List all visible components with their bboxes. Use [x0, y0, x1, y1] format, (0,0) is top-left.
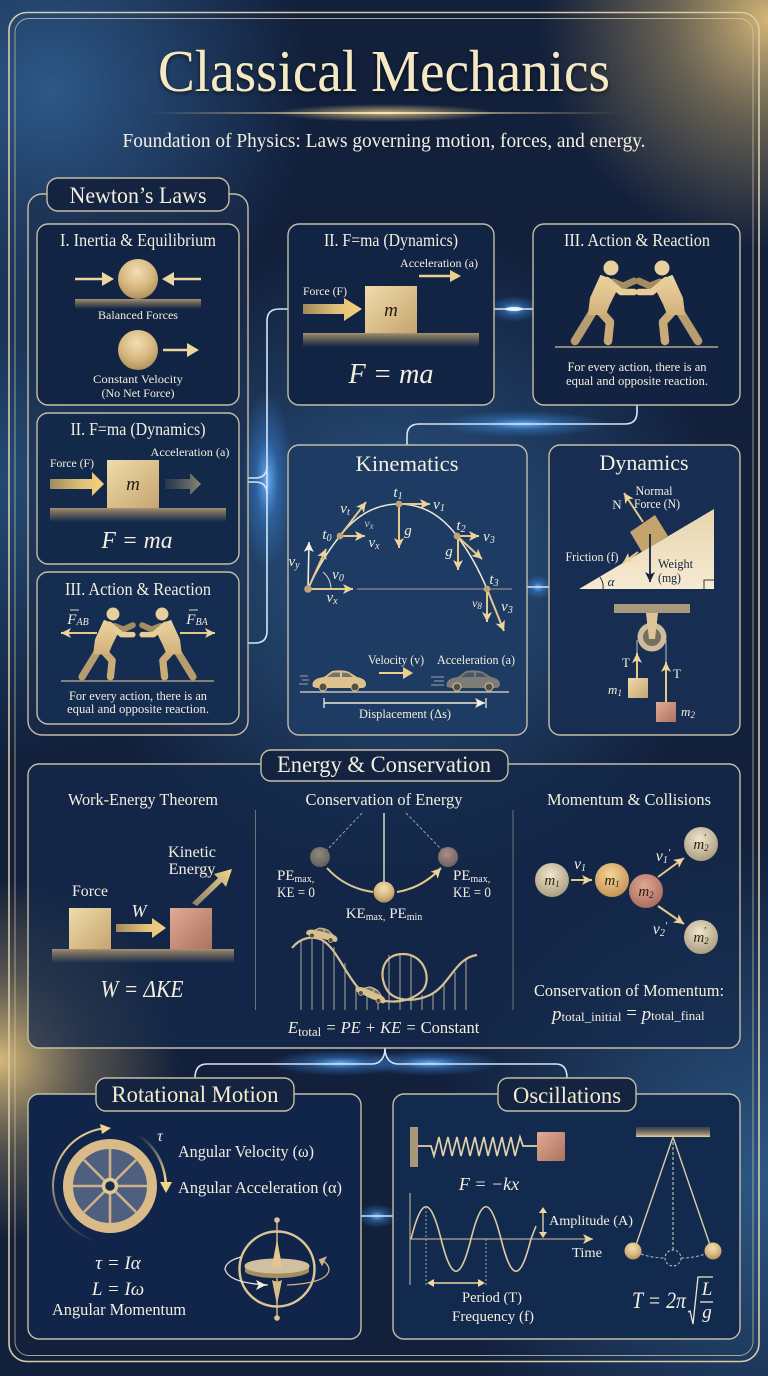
work-energy theorem: Work-Energy Theorem — [68, 790, 218, 809]
pendulum period formula: L — [701, 1279, 712, 1300]
conservation of energy: KE = 0 — [453, 885, 491, 901]
heading: rotational motion: Rotational Motion — [112, 1082, 279, 1107]
conservation of energy: Constant — [421, 1018, 480, 1037]
conservation of energy: min — [407, 912, 422, 923]
panel: action and reaction: For every action, there is an — [568, 360, 707, 374]
momentum and collisions: m — [638, 884, 649, 900]
momentum and collisions: v — [653, 921, 660, 938]
conservation of energy: KE = 0 — [277, 885, 315, 901]
momentum and collisions: 2 — [649, 890, 654, 900]
inclined plane: N — [612, 497, 622, 512]
projectile diagram: v — [472, 596, 477, 610]
panel: dynamics: Dynamics — [600, 450, 688, 475]
title: Classical Mechanics — [158, 38, 610, 104]
panel: F=ma dynamics: F = ma — [348, 358, 434, 390]
projectile diagram: 3 — [489, 535, 495, 546]
panel: action and reaction: III. Action & Reaction — [564, 230, 710, 250]
projectile diagram: v — [332, 567, 339, 583]
pulley: 1 — [617, 688, 622, 698]
conservation of energy: KE — [346, 906, 366, 922]
panel: F=ma dynamics: Force (F) — [303, 284, 347, 298]
sub-panel: action and reaction: For every action, there is an — [69, 689, 208, 703]
panel: rotational motion: L = Iω — [91, 1279, 144, 1300]
conservation of energy: = PE + KE = — [321, 1018, 421, 1037]
projectile diagram: v — [326, 590, 333, 606]
sub-panel: F=ma: Acceleration (a) — [150, 445, 230, 459]
work-energy theorem: Energy — [168, 861, 216, 878]
panel: F=ma dynamics — [288, 224, 494, 405]
sub-panel: F=ma — [37, 413, 239, 564]
conservation of energy — [277, 790, 491, 1039]
inclined plane: (mg) — [658, 570, 681, 585]
cars and displacement — [299, 652, 515, 721]
projectile diagram: t — [322, 527, 327, 543]
projectile diagram: 3 — [507, 605, 513, 616]
work-energy theorem — [52, 790, 234, 1003]
sub-panel: inertia — [37, 224, 239, 405]
conservation of energy: Conservation of Energy — [306, 790, 463, 809]
panel: F=ma dynamics: II. F=ma (Dynamics) — [324, 230, 458, 251]
cars and displacement: Displacement (Δs) — [359, 706, 451, 721]
wave graph: Period (T) — [462, 1290, 522, 1306]
panel: action and reaction — [533, 224, 740, 405]
sub-panel: action and reaction: F — [186, 612, 195, 628]
wave graph: Amplitude (A) — [549, 1214, 633, 1229]
panel: rotational motion — [28, 1078, 361, 1339]
conservation of energy: total — [298, 1024, 322, 1039]
wave graph: Time — [572, 1246, 602, 1261]
panel: kinematics — [288, 445, 527, 735]
inclined plane: Force (N) — [634, 496, 680, 511]
projectile diagram: 0 — [339, 573, 344, 584]
inclined plane: α — [608, 574, 616, 589]
wheel: τ — [157, 1128, 164, 1145]
conservation of energy: max, — [471, 874, 490, 885]
pendulum period formula — [632, 1277, 713, 1324]
work-energy theorem: Kinetic — [168, 844, 216, 861]
heading: Newton's Laws — [47, 178, 229, 211]
panel: oscillations — [393, 1078, 740, 1339]
projectile diagram: t — [393, 485, 398, 501]
momentum and collisions: total_initial — [562, 1009, 622, 1024]
inclined plane — [566, 483, 714, 589]
projectile diagram: v — [364, 516, 370, 530]
pendulum period formula: T = 2π — [632, 1288, 687, 1313]
momentum and collisions: v — [574, 856, 581, 873]
projectile diagram: v — [483, 529, 490, 545]
momentum and collisions: = — [621, 1003, 642, 1024]
momentum and collisions: m — [693, 930, 704, 946]
heading: oscillations — [498, 1078, 636, 1111]
sub-panel: action and reaction: BA — [195, 617, 209, 628]
panel: rotational motion: Angular Momentum — [52, 1300, 186, 1319]
momentum and collisions: 1 — [663, 855, 668, 866]
momentum and collisions: m — [693, 837, 704, 853]
sub-panel: action and reaction: III. Action & Reaction — [65, 579, 211, 599]
sub-panel: action and reaction — [37, 572, 239, 724]
projectile diagram: v — [501, 599, 508, 615]
connectors — [195, 296, 637, 1228]
panel: rotational motion: τ = Iα — [95, 1253, 142, 1274]
work-energy theorem: W = ΔKE — [100, 977, 184, 1003]
sub-panel: inertia: (No Net Force) — [102, 386, 174, 400]
pulley: m — [681, 704, 690, 719]
work-energy theorem: W — [132, 901, 148, 921]
panel: rotational motion: Angular Velocity (ω) — [178, 1142, 314, 1161]
conservation of energy: E — [288, 1018, 298, 1037]
work-energy theorem: Force — [72, 883, 108, 900]
momentum and collisions: v — [656, 848, 663, 865]
projectile diagram: 2 — [461, 524, 466, 535]
projectile diagram: v — [340, 501, 347, 517]
sub-panel: action and reaction: F — [67, 612, 76, 628]
projectile diagram: v — [368, 535, 375, 551]
pulley: m — [608, 682, 617, 697]
spring and mass: F = −kx — [458, 1174, 519, 1194]
heading: oscillations: Oscillations — [513, 1083, 621, 1108]
projectile diagram: g — [404, 523, 412, 539]
projectile diagram: 1 — [398, 491, 403, 502]
sub-panel: inertia: I. Inertia & Equilibrium — [60, 230, 216, 250]
sub-panel: F=ma: Force (F) — [50, 456, 94, 470]
conservation of energy: max, — [295, 874, 314, 885]
gyroscope — [225, 1217, 329, 1321]
roller coaster — [292, 924, 477, 1010]
momentum and collisions: Momentum & Collisions — [547, 790, 711, 809]
spring and mass — [410, 1127, 565, 1194]
panel: action and reaction: equal and opposite reaction. — [566, 374, 708, 388]
projectile diagram: t — [489, 572, 494, 588]
projectile diagram: y — [294, 560, 300, 571]
projectile diagram: x — [332, 596, 338, 607]
panel: F=ma dynamics: m — [384, 300, 398, 321]
panel: kinematics: Kinematics — [356, 451, 458, 476]
sub-panel: action and reaction: equal and opposite reaction. — [67, 702, 209, 716]
panel: rotational motion: Angular Acceleration (α) — [178, 1178, 342, 1197]
momentum and collisions: 2 — [704, 936, 709, 946]
wheel — [53, 1124, 172, 1241]
conservation of energy: PE — [277, 868, 295, 884]
projectile diagram: g — [445, 544, 453, 560]
momentum and collisions: ′ — [668, 847, 671, 859]
pendulum — [624, 1127, 722, 1266]
projectile diagram: 0 — [327, 533, 332, 544]
momentum and collisions — [534, 790, 724, 1025]
projectile diagram: 1 — [440, 503, 445, 514]
momentum and collisions: total_final — [651, 1008, 705, 1023]
momentum and collisions: ′ — [704, 833, 707, 844]
panel: F=ma dynamics: Acceleration (a) — [400, 256, 478, 270]
projectile diagram: v — [433, 497, 440, 513]
panel: energy and conservation — [28, 750, 740, 1048]
conservation of energy: max, — [366, 912, 385, 923]
pulley: T — [673, 666, 681, 681]
inclined plane: Friction (f) — [566, 549, 618, 564]
momentum and collisions: 2 — [704, 843, 709, 853]
momentum and collisions: m — [544, 873, 555, 889]
projectile diagram — [288, 485, 513, 631]
title divider — [150, 104, 620, 122]
inclined plane: Normal — [636, 483, 673, 498]
panel: dynamics — [549, 445, 740, 735]
momentum and collisions: 2 — [660, 928, 665, 939]
sub-panel: action and reaction: AB — [75, 617, 89, 628]
projectile diagram: 3 — [493, 578, 499, 589]
projectile diagram: v — [288, 554, 295, 570]
wave graph — [410, 1193, 633, 1325]
pendulum period formula: g — [702, 1302, 712, 1323]
projectile diagram: t — [347, 507, 350, 518]
conservation of energy: PE — [385, 906, 407, 922]
momentum and collisions: Conservation of Momentum: — [534, 981, 724, 1000]
sub-panel: F=ma: m — [126, 474, 140, 495]
heading: rotational motion — [96, 1078, 294, 1111]
projectile diagram: t — [456, 518, 461, 534]
momentum and collisions: 1 — [555, 879, 560, 889]
momentum and collisions: 1 — [615, 879, 620, 889]
inclined plane: Weight — [658, 556, 693, 571]
momentum and collisions: ′ — [665, 920, 668, 932]
pulley: T — [622, 655, 630, 670]
momentum and collisions: m — [604, 873, 615, 889]
cars and displacement: Acceleration (a) — [437, 652, 515, 667]
momentum and collisions: ′ — [704, 926, 707, 937]
sub-panel: inertia: Constant Velocity — [93, 372, 183, 386]
momentum and collisions: 1 — [581, 863, 586, 874]
conservation of energy: PE — [453, 868, 471, 884]
panel: Newton's Laws — [28, 178, 248, 735]
sub-panel: inertia: Balanced Forces — [98, 308, 178, 322]
momentum and collisions: p — [552, 1004, 562, 1025]
cars and displacement: Velocity (v) — [368, 652, 424, 667]
pulley: 2 — [690, 710, 695, 720]
wave graph: Frequency (f) — [452, 1309, 534, 1325]
projectile diagram: 8 — [477, 601, 482, 611]
heading: Newton's Laws: Newton’s Laws — [70, 183, 207, 208]
pulley — [608, 604, 695, 722]
subtitle: Foundation of Physics: Laws governing motion, forces, and energy. — [122, 130, 646, 152]
projectile diagram: x — [374, 541, 380, 552]
sub-panel: F=ma: II. F=ma (Dynamics) — [70, 419, 206, 440]
momentum and collisions: p — [640, 1004, 651, 1025]
projectile diagram: x — [369, 521, 374, 531]
heading: energy and conservation: Energy & Conservation — [277, 752, 491, 777]
sub-panel: F=ma: F = ma — [101, 528, 172, 554]
